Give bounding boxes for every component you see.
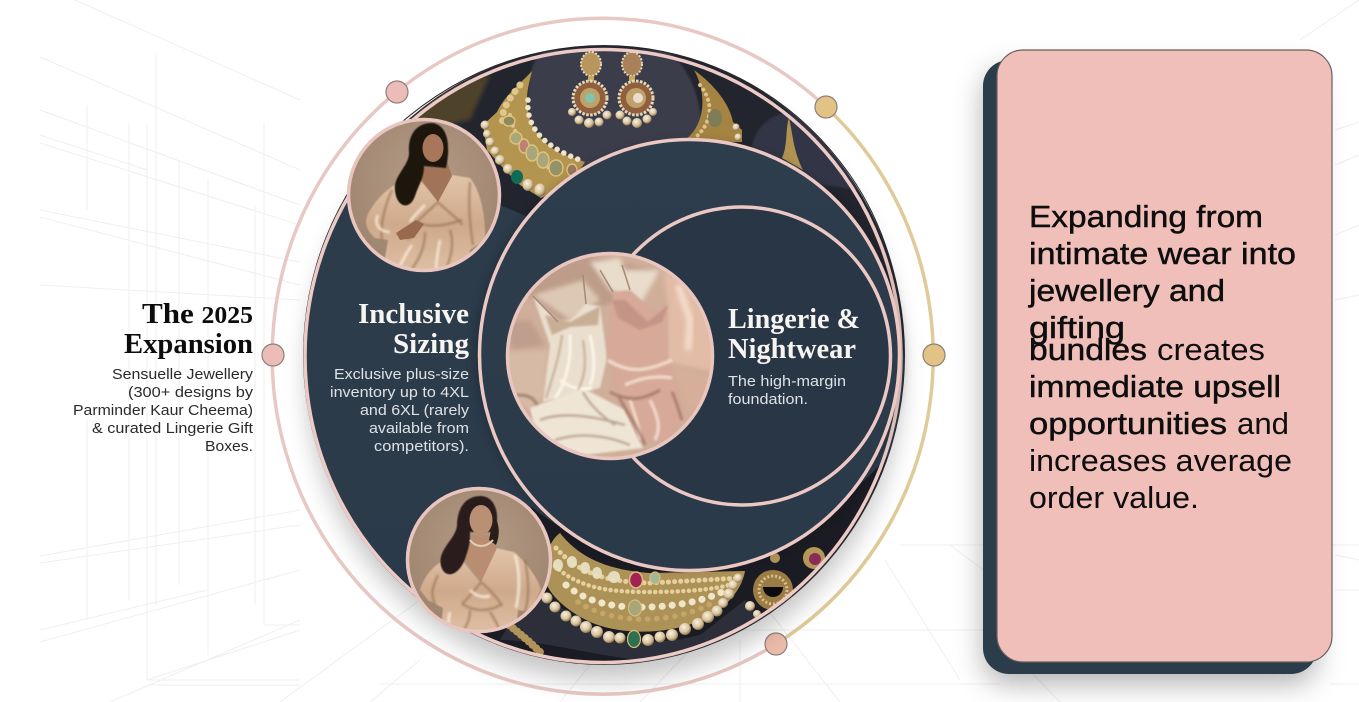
description: inclusive sizing: and 6XL (rarely (360, 403, 470, 419)
card text: gifting (1029, 310, 1125, 345)
description: inclusive sizing: available from (369, 421, 469, 437)
face (422, 134, 444, 162)
robe (420, 548, 541, 635)
card text: increases average (1029, 443, 1292, 478)
jewellery photo: top (395, 30, 905, 680)
necklace: far right (782, 118, 803, 170)
emerald pendant (628, 630, 640, 648)
node: upper left (386, 81, 408, 103)
chest (465, 535, 497, 582)
robe (366, 175, 485, 275)
arc: gold orbit (776, 107, 933, 644)
card text: creates (1157, 332, 1265, 367)
earring: far right (803, 547, 825, 569)
description: jewellery and gift boxes: Boxes. (205, 439, 253, 455)
heading: inclusive sizing (358, 298, 469, 360)
bust: right (751, 112, 860, 190)
ruby (630, 572, 642, 588)
description: jewellery and gift boxes (73, 367, 254, 455)
orbit nodes (262, 81, 945, 655)
cream highlights (555, 335, 594, 398)
photo: woman in satin robe, lower (405, 487, 555, 635)
hand (396, 220, 424, 240)
description: inclusive sizing (330, 367, 470, 455)
pink slip (606, 289, 668, 442)
card text: opportunities (1029, 406, 1227, 441)
inner circle: lingerie and nightwear (594, 207, 890, 505)
outer circle dark edge (395, 46, 904, 355)
photo: silk lingerie (505, 250, 717, 462)
node: upper right (815, 96, 837, 118)
heading: inclusive sizing: Sizing (393, 328, 469, 360)
bust: centre (527, 50, 704, 180)
necklace stones (503, 116, 515, 126)
text block: lingerie and nightwear (728, 303, 860, 408)
emerald (511, 170, 523, 184)
earring: lower right (745, 553, 793, 618)
description: jewellery and gift boxes: (300+ designs by (128, 385, 254, 401)
hair (440, 496, 497, 574)
jewellery photo: bottom (480, 456, 888, 661)
card text: immediate upsell (1029, 369, 1281, 404)
card front (997, 50, 1332, 662)
card back (983, 60, 1317, 674)
hair (395, 123, 448, 205)
text block: the 2025 expansion (73, 298, 254, 455)
description: high-margin foundation: The high-margin (728, 374, 846, 390)
heading: lingerie and nightwear: Lingerie & (728, 303, 860, 335)
card text: and (1237, 406, 1289, 441)
card text: jewellery and (1028, 273, 1225, 308)
bracelet (505, 622, 540, 652)
description: jewellery and gift boxes: & curated Lingerie Gift (92, 421, 253, 437)
heading: the 2025 expansion: The 2025 (142, 298, 253, 330)
description: high-margin foundation (728, 374, 846, 408)
card text (1028, 199, 1296, 515)
heading: inclusive sizing: Inclusive (358, 298, 469, 330)
cream slip (533, 296, 607, 402)
heading: lingerie and nightwear: Nightwear (728, 333, 856, 365)
callout card (983, 50, 1332, 674)
description: inclusive sizing: Exclusive plus-size (334, 367, 469, 383)
heading: lingerie and nightwear (728, 303, 860, 365)
description: inclusive sizing: inventory up to 4XL (330, 385, 469, 401)
robe right (664, 273, 711, 370)
card text: Expanding from (1029, 199, 1263, 234)
photo: woman in satin robe, upper (345, 115, 505, 275)
necklace: upper left (483, 71, 585, 198)
text block: inclusive sizing (330, 298, 470, 455)
arc: pink orbit (272, 18, 826, 694)
pillows left (510, 320, 543, 349)
description: inclusive sizing: competitors). (374, 439, 469, 455)
necklace: lower centre (544, 533, 745, 632)
face (470, 505, 492, 535)
description: jewellery and gift boxes: Parminder Kaur Cheema) (73, 403, 253, 419)
outer orbit ring (272, 18, 933, 694)
outer circle: inclusive sizing panel (303, 30, 905, 680)
soft shadow under main circle (306, 69, 902, 681)
middle circle (475, 140, 903, 570)
straps (533, 265, 630, 322)
card text: bundles (1029, 332, 1147, 367)
heading: the 2025 expansion: Expansion (124, 328, 253, 360)
card text: intimate wear into (1029, 236, 1296, 271)
cream lower fabric (530, 388, 643, 458)
robe folds (382, 182, 473, 272)
earring: left (568, 52, 612, 128)
necklace on model (470, 540, 493, 546)
description: jewellery and gift boxes: Sensuelle Jewellery (112, 367, 254, 383)
description: high-margin foundation: foundation. (728, 392, 808, 408)
node: lower right (765, 633, 787, 655)
earring: right (616, 52, 657, 128)
chest (421, 162, 452, 202)
card text: order value. (1029, 480, 1199, 515)
node: right (923, 344, 945, 366)
node: left (262, 344, 284, 366)
robe folds (432, 560, 528, 634)
outer circle pink stroke (305, 50, 901, 662)
heading: the 2025 expansion (124, 298, 253, 360)
necklace: upper right (682, 70, 742, 142)
